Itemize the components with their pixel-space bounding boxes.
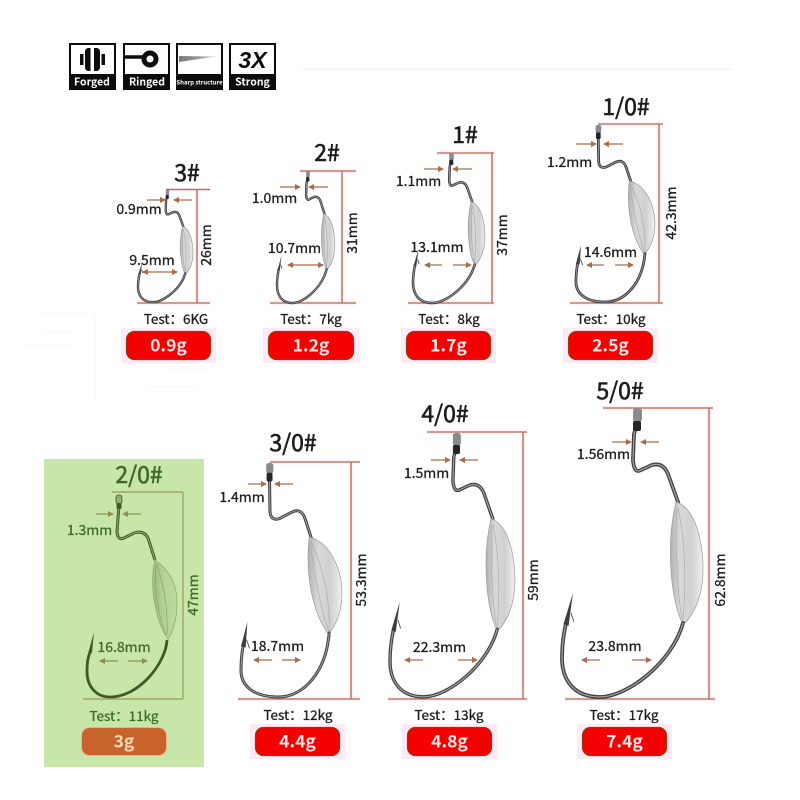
hook card: 2#: 31mm	[342, 212, 362, 254]
test 1/0#: Test：10kg	[576, 308, 646, 328]
test 1#: Test：8kg	[418, 308, 480, 328]
weight badge 2#	[263, 328, 359, 363]
hook card: 1/0#	[547, 88, 681, 363]
size title 2#: 2#	[314, 134, 340, 168]
badge: Ringed: Ringed	[129, 74, 165, 90]
dimensions 5/0#: 1.56mm	[577, 444, 630, 464]
dimensions 1#: 1.1mm	[396, 171, 441, 191]
test 2/0#: Test：11kg	[89, 705, 159, 725]
hook drawing 2/0#	[87, 495, 177, 697]
dimensions 3#: 0.9mm	[116, 199, 162, 219]
hook card: 4/0#	[388, 395, 543, 759]
hook card: 2/0# highlighted green panel	[44, 456, 204, 767]
weight badge 5/0#	[577, 724, 672, 759]
badge: Forged: Forged	[74, 74, 110, 90]
weight badge 5/0#: 7.4g	[606, 728, 643, 754]
badge: 3X Strong	[229, 43, 276, 90]
dimensions 4/0#: 1.5mm	[404, 463, 449, 483]
hook card: 1/0#: 14.6mm	[584, 242, 637, 262]
hook card: 3#: 26mm	[196, 224, 216, 266]
dimensions 1/0#: 1.2mm	[547, 152, 592, 172]
weight badge 4/0#	[402, 724, 497, 759]
test 2#: Test：7kg	[280, 308, 342, 328]
hook drawing 3#	[138, 190, 193, 302]
dimensions 2#: 1.0mm	[252, 188, 297, 208]
weight badge 3#	[121, 328, 216, 363]
size title 1#: 1#	[452, 116, 478, 150]
test 4/0#: Test：13kg	[414, 704, 484, 724]
hook card: 4/0#: 59mm	[523, 559, 543, 601]
hook card: 1#	[396, 116, 512, 363]
weight badge 3/0#	[250, 724, 345, 759]
badge: Sharp structure: Sharp structure	[176, 78, 223, 86]
dimensions 3/0#: 1.4mm	[219, 487, 265, 507]
badge: 3X Strong: 3X	[238, 47, 268, 73]
size title 2/0#: 2/0#	[115, 456, 163, 490]
hook card: 5/0#: 23.8mm	[588, 636, 642, 656]
test 3#: Test：6KG	[144, 308, 208, 328]
size title 4/0#: 4/0#	[421, 395, 469, 429]
weight badge 3#: 0.9g	[150, 332, 187, 358]
weight badge 3/0#: 4.4g	[279, 728, 316, 754]
hook card: 1/0#: 42.3mm	[661, 186, 681, 240]
test 3/0#: Test：12kg	[263, 704, 333, 724]
hook card: 3/0#: 18.7mm	[251, 636, 304, 656]
hook card: 4/0#: 22.3mm	[413, 637, 466, 657]
weight badge 2/0#	[82, 728, 166, 756]
weight badge 1/0#	[563, 328, 658, 363]
hook drawing 4/0#	[390, 433, 515, 697]
hook drawing 1#	[413, 153, 485, 303]
hook card: 2/0# highlighted green panel: 16.8mm	[97, 637, 151, 657]
hook card: 3#	[116, 154, 216, 363]
hook drawing 1/0#	[576, 125, 655, 302]
badge: Ringed	[123, 43, 170, 90]
weight badge 1#: 1.7g	[430, 332, 467, 358]
dimensions 2/0#: 1.3mm	[67, 520, 112, 540]
hook card: 2/0# highlighted green panel: 47mm	[183, 574, 203, 616]
badge: Forged	[69, 43, 116, 90]
weight badge 2#: 1.2g	[293, 332, 330, 358]
size title 5/0#: 5/0#	[596, 372, 644, 406]
size title 3#: 3#	[174, 154, 200, 188]
hook card: 3/0#: 53.3mm	[351, 553, 371, 607]
badge: Sharp structure	[176, 43, 223, 90]
hook card: 5/0#	[562, 372, 730, 759]
hook card: 2#	[252, 134, 362, 363]
size title 3/0#: 3/0#	[269, 424, 317, 458]
hook card: 3/0#	[219, 424, 371, 759]
hook drawing 2#	[277, 171, 335, 303]
weight badge 2/0#: 3g	[114, 728, 135, 754]
hook card: 1#: 13.1mm	[410, 237, 464, 257]
feature badges row	[69, 43, 276, 90]
hook drawing 3/0#	[241, 463, 342, 697]
weight badge 1#	[401, 328, 496, 363]
test 5/0#: Test：17kg	[589, 704, 659, 724]
panel: green highlight	[44, 459, 204, 767]
weight badge 4/0#: 4.8g	[431, 728, 468, 754]
hook card: 1#: 37mm	[492, 214, 512, 256]
hook card: 3#: 9.5mm	[129, 250, 175, 270]
hook drawing 5/0#	[562, 408, 703, 697]
badge: 3X Strong: Strong	[235, 74, 271, 90]
hook card: 5/0#: 62.8mm	[710, 553, 730, 607]
size title 1/0#: 1/0#	[602, 88, 650, 122]
hook card: 2#: 10.7mm	[268, 238, 321, 258]
weight badge 1/0#: 2.5g	[592, 332, 629, 358]
